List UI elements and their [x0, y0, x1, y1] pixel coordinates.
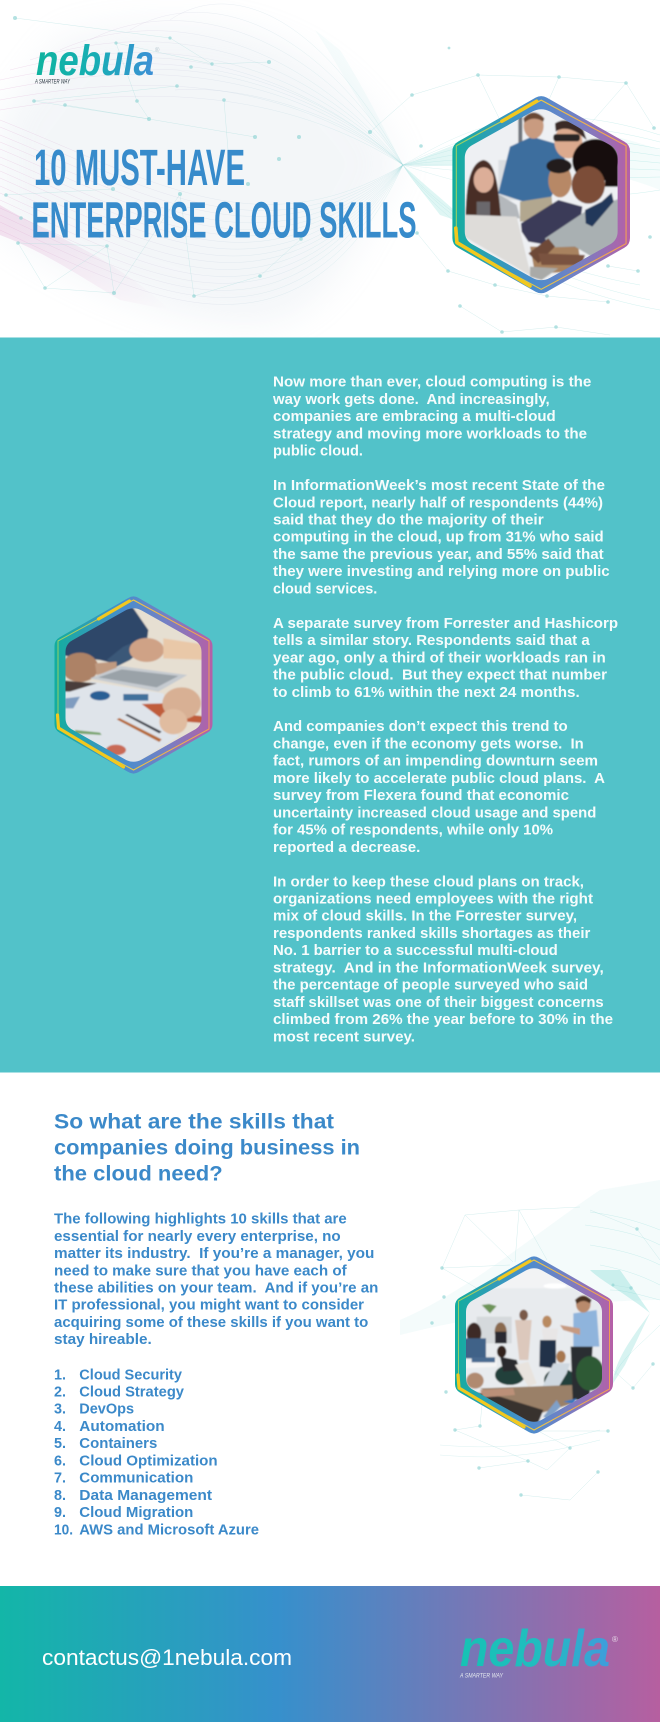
list: ten cloud skills: Containers [79, 1436, 157, 1452]
title [32, 139, 416, 248]
text: skills introduction: acquiring some of these skills if you want to [54, 1315, 369, 1331]
text: intro paragraph 4: uncertainty increased cloud usage and spend [273, 805, 596, 821]
header panel background waves [0, 4, 660, 325]
text: intro paragraph 2: said that they do the majority of their [273, 512, 544, 528]
list: ten cloud skills: 7. [54, 1471, 66, 1487]
text: intro paragraph 3: year ago, only a third of their workloads ran in [273, 650, 606, 666]
text: intro paragraph 1: Now more than ever, cloud computing is the [273, 375, 591, 391]
text: skills introduction [54, 1212, 378, 1348]
list: ten cloud skills: Cloud Migration [79, 1505, 193, 1521]
list: ten cloud skills: Communication [79, 1471, 193, 1487]
heading: skills question: the cloud need? [54, 1162, 223, 1185]
list: ten cloud skills: 6. [54, 1453, 66, 1469]
text: intro paragraph 5: organizations need employees with the right [273, 892, 593, 908]
logo: nebula header: A SMARTER WAY [34, 78, 70, 86]
list: ten cloud skills: Cloud Security [79, 1367, 182, 1383]
text: intro paragraph 5: strategy. And in the InformationWeek survey, [273, 960, 604, 976]
hexagon photo: team at laptop [455, 97, 628, 290]
list: ten cloud skills: AWS and Microsoft Azure [79, 1522, 259, 1538]
text: intro paragraph 4: reported a decrease. [273, 840, 420, 856]
list: ten cloud skills: 10. [54, 1522, 73, 1538]
text: intro paragraph 5 [273, 874, 613, 1045]
text: skills introduction: stay hireable. [54, 1332, 152, 1348]
list: ten cloud skills: Cloud Optimization [79, 1453, 218, 1469]
text: intro paragraph 5: the percentage of people surveyed who said [273, 978, 588, 994]
text: intro paragraph 4: fact, rumors of an impending downturn seem [273, 754, 598, 770]
text: intro paragraph 2: they were investing and relying more on public [273, 564, 610, 580]
text: intro paragraph 2: the same the previous year, and 55% said that [273, 547, 604, 563]
hexagon photo: hands over tablet and charts [57, 600, 210, 770]
text: intro paragraph 2: computing in the cloud, up from 31% who said [273, 530, 604, 546]
text: skills introduction: need to make sure that you have each of [54, 1263, 347, 1279]
text: intro paragraph 2: In InformationWeek’s most recent State of the [273, 478, 605, 494]
text: skills introduction: IT professional, you might want to consider [54, 1298, 364, 1314]
list: ten cloud skills: Automation [79, 1419, 165, 1435]
list: ten cloud skills: 5. [54, 1436, 66, 1452]
list: ten cloud skills: 2. [54, 1384, 66, 1400]
logo: nebula footer: nebula [460, 1620, 610, 1678]
text: intro paragraph 1 [272, 375, 591, 460]
text: intro paragraph 3: A separate survey from Forrester and Hashicorp [273, 616, 618, 632]
header network of dots [4, 16, 656, 335]
list: ten cloud skills: 3. [54, 1402, 66, 1418]
list: ten cloud skills [54, 1367, 259, 1538]
list: ten cloud skills: 1. [54, 1367, 66, 1383]
text: intro paragraph 5: staff skillset was one of their biggest concerns [273, 995, 604, 1011]
text: intro paragraph 1: companies are embracing a multi-cloud [273, 409, 556, 425]
logo: nebula footer: ® [612, 1635, 618, 1644]
text: intro paragraph 4: for 45% of respondents, while only 10% [273, 823, 553, 839]
text: intro paragraph 2: cloud services. [273, 581, 377, 597]
list: ten cloud skills: DevOps [79, 1402, 134, 1418]
footer panel [0, 1586, 660, 1722]
list: ten cloud skills: Cloud Strategy [79, 1384, 184, 1400]
text: intro paragraph 4 [273, 719, 606, 856]
text: intro paragraph 5: mix of cloud skills. In the Forrester survey, [273, 909, 577, 925]
text: skills introduction: these abilities on your team. And if you’re an [54, 1280, 378, 1296]
text: intro paragraph 3: tells a similar story. Respondents said that a [273, 633, 591, 649]
heading: skills question [54, 1110, 360, 1185]
text: skills introduction: essential for nearly every enterprise, no [54, 1229, 341, 1245]
text: intro paragraph 5: In order to keep these cloud plans on track, [273, 874, 584, 890]
text: intro paragraph 4: change, even if the economy gets worse. In [273, 736, 584, 752]
list: ten cloud skills: 8. [54, 1488, 66, 1504]
text: intro paragraph 2 [273, 478, 610, 597]
panel: teal intro [0, 338, 660, 1072]
text: intro paragraph 1: strategy and moving more workloads to the [273, 426, 587, 442]
text: intro paragraph 4: more likely to accelerate public cloud plans. A [273, 771, 606, 787]
text: intro paragraph 4: And companies don’t expect this trend to [273, 719, 568, 735]
text: intro paragraph 5: No. 1 barrier to a successful multi-cloud [273, 943, 558, 959]
text: intro paragraph 5: most recent survey. [273, 1029, 415, 1045]
title: 10 MUST-HAVE [34, 139, 245, 196]
list: ten cloud skills: Data Management [79, 1488, 212, 1504]
heading: skills question: So what are the skills that [54, 1110, 334, 1133]
hexagon photo: office team meeting [458, 1260, 610, 1430]
logo: nebula footer: A SMARTER WAY [459, 1672, 503, 1680]
text: intro paragraph 1: way work gets done. And increasingly, [272, 392, 550, 408]
logo: nebula header: nebula [36, 37, 154, 85]
text: intro paragraph 1: public cloud. [273, 444, 363, 460]
text: skills introduction: The following highlights 10 skills that are [54, 1212, 347, 1228]
logo: nebula header: ® [155, 47, 160, 54]
text: intro paragraph 3 [273, 616, 618, 701]
text: intro paragraph 2: Cloud report, nearly half of respondents (44%) [273, 495, 603, 511]
heading: skills question: companies doing business in [54, 1136, 360, 1159]
text: intro paragraph 5: respondents ranked skills shortages as their [273, 926, 591, 942]
contact email: contactus@1nebula.com [42, 1645, 292, 1670]
section background waves and network [400, 1180, 660, 1500]
text: intro paragraph 5: climbed from 26% the year before to 30% in the [273, 1012, 613, 1028]
list: ten cloud skills: 9. [54, 1505, 66, 1521]
text: skills introduction: matter its industry. If you’re a manager, you [54, 1246, 374, 1262]
list: ten cloud skills: 4. [54, 1419, 66, 1435]
text: intro paragraph 4: survey from Flexera found that economic [273, 788, 569, 804]
text: intro paragraph 3: to climb to 61% within the next 24 months. [273, 685, 580, 701]
text: intro paragraph 3: the public cloud. But they expect that number [273, 668, 607, 684]
